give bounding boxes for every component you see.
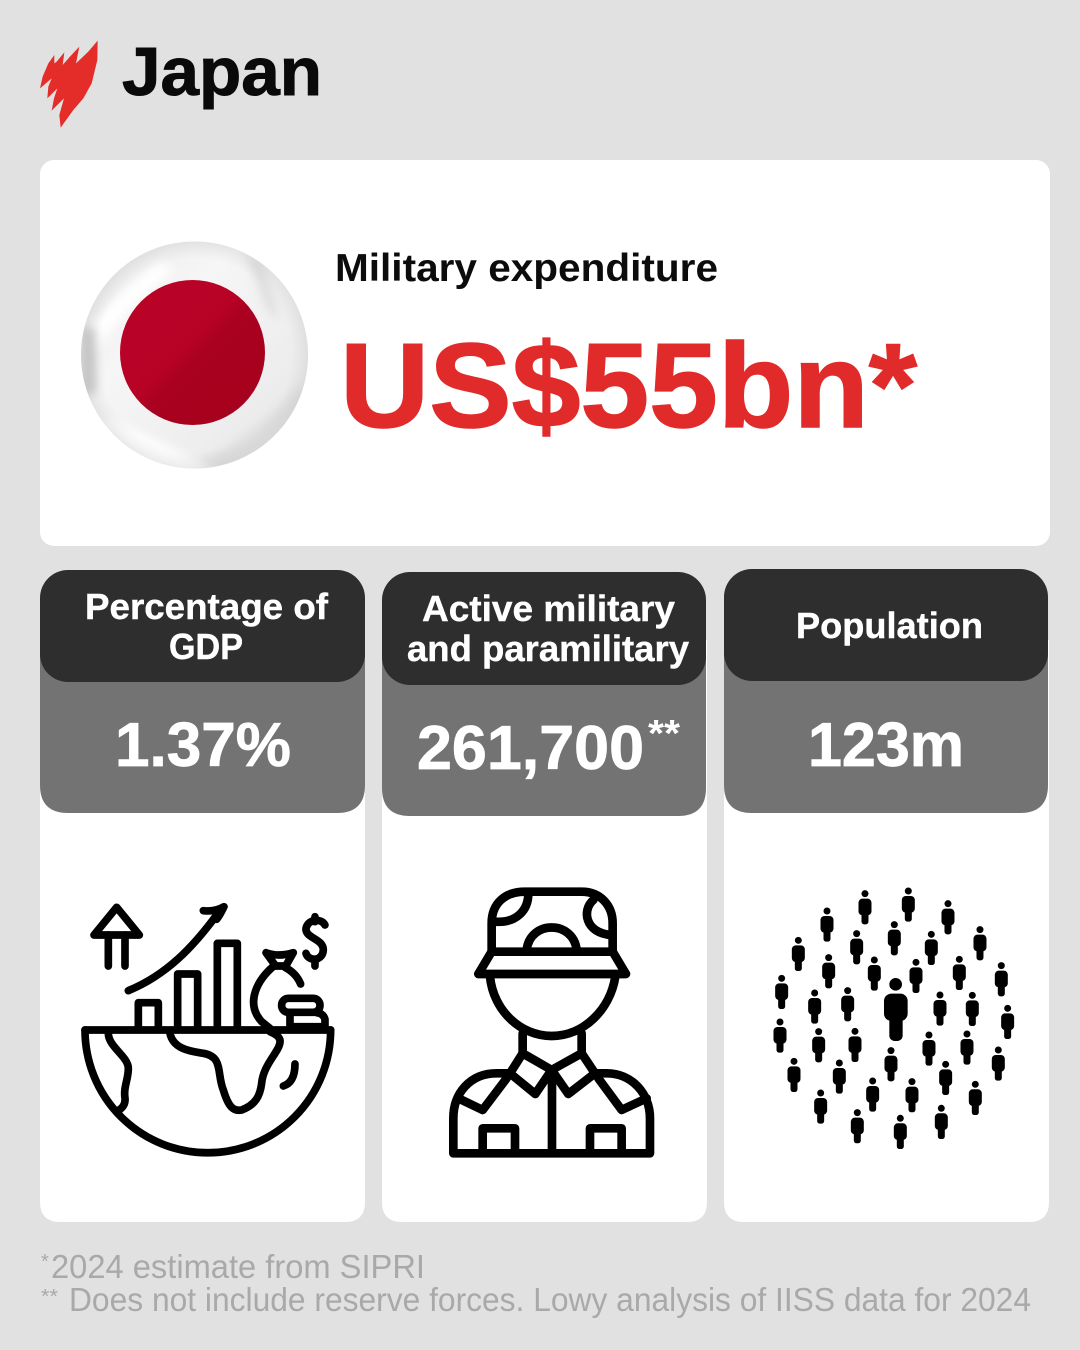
panel: population (724, 569, 1049, 1222)
heading band: Population (796, 605, 983, 646)
icon: Japanese flag circle (78, 242, 310, 480)
icon: soldier (453, 892, 650, 1153)
footnotes: ** (41, 1286, 58, 1308)
value: 261,700: ** (648, 713, 680, 755)
value: US$55bn: US$55bn* (340, 319, 917, 453)
heading band: and paramilitary (407, 628, 689, 669)
value band (382, 652, 706, 816)
panel: military expenditure (40, 160, 1050, 546)
heading band: Active military (422, 588, 675, 629)
panel: active military and paramilitary (382, 572, 707, 1222)
icon: crowd of people (773, 887, 1014, 1149)
title: Japan (122, 34, 322, 110)
header: logo and country name (40, 34, 322, 128)
label: Military expenditure: Military expenditure (335, 247, 718, 290)
icon: globe with growth chart and money (85, 907, 331, 1153)
footnotes: * (41, 1251, 49, 1273)
value: 123m: 123m (808, 711, 964, 780)
value band (40, 650, 365, 813)
heading band (40, 570, 365, 682)
heading band (724, 569, 1048, 681)
value band (724, 650, 1048, 813)
value: 1.37%: 1.37% (115, 711, 291, 780)
heading band: GDP (169, 626, 243, 667)
heading band: Percentage of (85, 586, 329, 627)
heading band (382, 572, 706, 685)
value: 261,700: 261,700 (417, 714, 644, 783)
footnotes: Does not include reserve forces. Lowy analysis of IISS data for 2024 (69, 1281, 1031, 1318)
panel: percentage of GDP (40, 570, 365, 1222)
footnotes: 2024 estimate from SIPRI (51, 1248, 425, 1285)
icon: red flame logo (40, 41, 98, 128)
footnotes (41, 1248, 1031, 1318)
